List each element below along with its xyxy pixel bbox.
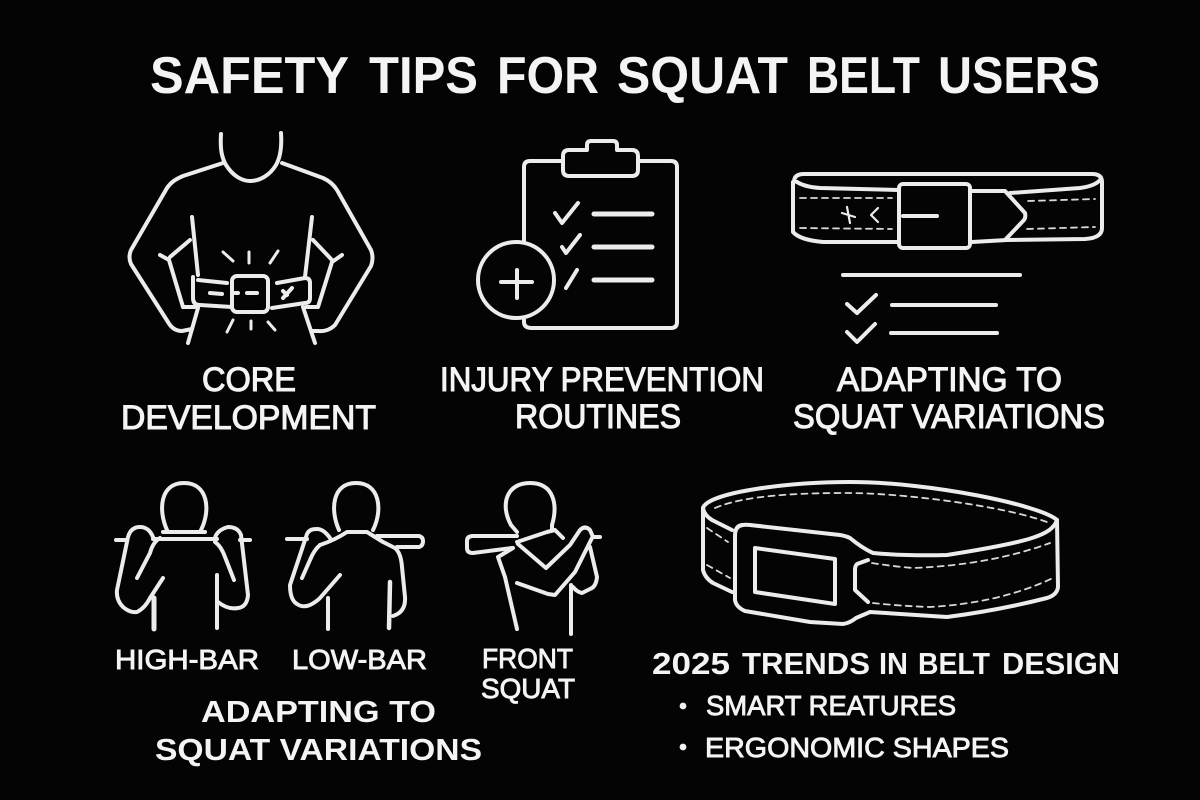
title: FOR xyxy=(497,47,599,105)
labels: bar positions: LOW-BAR xyxy=(292,644,427,675)
label: adapting to squat variations: SQUAT VARIATIONS xyxy=(793,398,1105,436)
label: core development: DEVELOPMENT xyxy=(121,399,376,437)
list: belt trends: ERGONOMIC SHAPES xyxy=(705,732,1009,763)
labels: bar positions: SQUAT xyxy=(481,673,575,704)
label: adapting to squat variations xyxy=(155,694,482,767)
list: belt trends xyxy=(680,690,1009,763)
label: injury prevention routines: INJURY PREVENTION xyxy=(440,361,764,399)
label: adapting to squat variations: SQUAT VARIATIONS xyxy=(155,732,482,767)
icon: high-bar figure xyxy=(116,483,250,629)
icon: checklist xyxy=(843,275,1020,342)
title xyxy=(150,47,1100,105)
icon: large lifting belt xyxy=(703,482,1058,624)
labels: bar positions: FRONT xyxy=(482,643,573,674)
label: core development xyxy=(121,361,376,437)
label: adapting to squat variations: ADAPTING TO xyxy=(837,361,1062,399)
title: BELT xyxy=(807,47,920,105)
heading: 2025 trends: BELT xyxy=(918,646,990,681)
heading: 2025 trends: DESIGN xyxy=(1002,646,1120,681)
label: adapting to squat variations xyxy=(793,361,1105,436)
panel: adapting to squat variations, belt checklist xyxy=(793,174,1105,436)
heading: 2025 trends xyxy=(652,646,1120,681)
panel: 2025 trends in belt design xyxy=(652,482,1120,763)
heading: 2025 trends: 2025 xyxy=(652,646,730,681)
label: injury prevention routines xyxy=(440,361,764,436)
panel: squat bar positions xyxy=(115,483,600,767)
panel: core development xyxy=(121,133,376,437)
icon: belt with buckle xyxy=(793,174,1102,248)
label: adapting to squat variations: ADAPTING TO xyxy=(201,694,436,729)
heading: 2025 trends: TRENDS xyxy=(742,646,870,681)
icon: front squat figure xyxy=(467,483,600,634)
label: core development: CORE xyxy=(202,361,296,399)
labels: bar positions: HIGH-BAR xyxy=(115,644,259,675)
icon: low-bar figure xyxy=(287,483,423,629)
labels: bar positions xyxy=(115,643,575,704)
heading: 2025 trends: IN xyxy=(879,646,908,681)
title: USERS xyxy=(938,47,1100,105)
label: injury prevention routines: ROUTINES xyxy=(515,398,681,436)
icon: clipboard with plus xyxy=(478,141,677,328)
title: SQUAT xyxy=(617,47,788,105)
panel: injury prevention routines xyxy=(440,141,764,436)
title: TIPS xyxy=(369,47,478,105)
title: SAFETY xyxy=(150,47,349,105)
list: belt trends: SMART REATURES xyxy=(706,690,956,721)
icon: torso with belt xyxy=(130,133,372,343)
